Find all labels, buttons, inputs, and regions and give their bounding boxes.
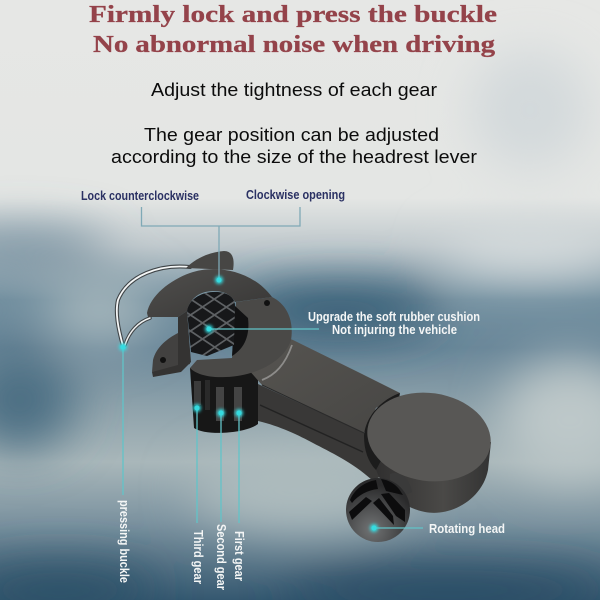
callout: rotation directions bbox=[81, 187, 345, 284]
label: clockwise opening: Clockwise opening bbox=[246, 187, 345, 202]
bracket lines bbox=[142, 207, 300, 280]
disc pivot bbox=[361, 385, 497, 513]
title: Firmly lock and press the buckle bbox=[89, 1, 497, 28]
callout: first gear bbox=[232, 409, 247, 581]
callout: pressing buckle: pressing buckle bbox=[117, 500, 132, 583]
callout: first gear: First gear bbox=[232, 531, 247, 581]
callout: soft rubber cushion: Not injuring the vehicle bbox=[332, 322, 457, 337]
callout: third gear bbox=[191, 404, 206, 584]
clamp post bbox=[152, 311, 191, 377]
arm bbox=[240, 335, 400, 480]
lower ring bbox=[190, 297, 292, 377]
callout: third gear: Third gear bbox=[191, 530, 206, 584]
product: headrest hook bbox=[117, 251, 497, 542]
rubber cushion roller bbox=[187, 292, 235, 356]
callout: soft rubber cushion: Upgrade the soft rubber cushion bbox=[308, 309, 480, 324]
label: lock counterclockwise: Lock counterclockwise bbox=[81, 188, 199, 203]
wire pressing buckle bbox=[117, 267, 190, 346]
callout: second gear: Second gear bbox=[214, 524, 229, 590]
upper back fin bbox=[186, 251, 234, 270]
title: No abnormal noise when driving bbox=[93, 31, 496, 58]
callout: rotating head bbox=[370, 521, 505, 536]
text block: gear position: The gear position can be adjusted bbox=[144, 124, 439, 145]
upper plate bbox=[147, 269, 272, 317]
text block: adjust tightness: Adjust the tightness of each gear bbox=[151, 79, 437, 100]
callout: pressing buckle bbox=[117, 343, 132, 583]
gear column bbox=[190, 368, 258, 433]
text block: gear position: according to the size of the headrest lever bbox=[111, 146, 477, 167]
rotating head ball bbox=[346, 473, 412, 542]
lower clamp lip bbox=[152, 333, 190, 372]
callout: soft rubber cushion bbox=[205, 309, 480, 337]
text block: gear position bbox=[111, 124, 477, 167]
title bbox=[89, 1, 497, 58]
callout: rotating head: Rotating head bbox=[429, 521, 505, 536]
callout: second gear bbox=[214, 409, 229, 590]
marker bbox=[215, 276, 223, 284]
